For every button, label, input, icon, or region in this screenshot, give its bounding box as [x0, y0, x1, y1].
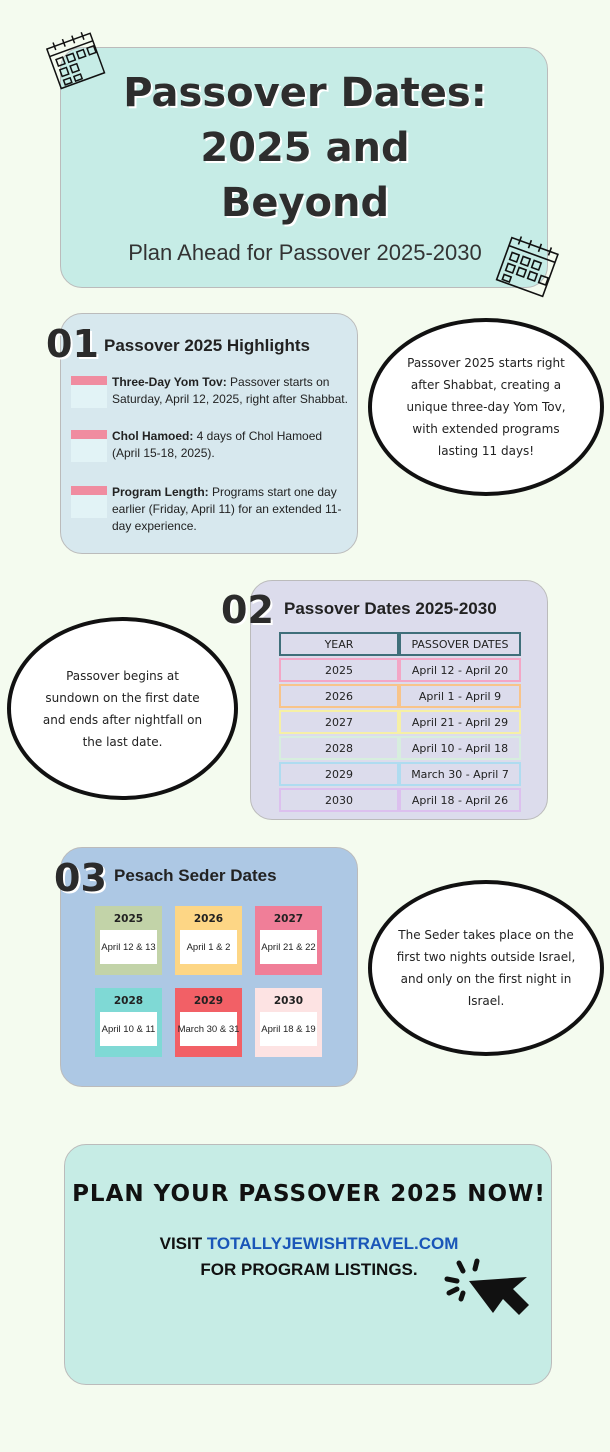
card 2026: 2026 [194, 913, 223, 925]
card 2026 [175, 906, 242, 975]
table [279, 632, 521, 812]
table: April 18 - April 26 [412, 794, 508, 806]
card 2029 [175, 988, 242, 1057]
table: 2029 [325, 768, 353, 780]
heading 01: Passover 2025 Highlights [104, 336, 310, 355]
card 2030 [255, 988, 322, 1057]
title: 2025 and [200, 125, 410, 171]
title: Passover Dates: [123, 70, 487, 116]
speech bubble 3 [368, 880, 604, 1056]
cta heading: PLAN YOUR PASSOVER 2025 NOW! [72, 1181, 546, 1207]
title [123, 70, 487, 226]
card 2028: April 10 & 11 [102, 1024, 155, 1034]
card 2025 [95, 906, 162, 975]
table: 2025 [325, 664, 353, 676]
panel: 03 seder dates [60, 847, 358, 1087]
table: 2026 [325, 690, 353, 702]
cta text [160, 1234, 458, 1279]
cta text: FOR PROGRAM LISTINGS. [200, 1260, 418, 1279]
table: April 12 - April 20 [412, 664, 508, 676]
cta text: VISIT TOTALLYJEWISHTRAVEL.COM [160, 1234, 458, 1253]
card 2028 [95, 988, 162, 1057]
table: YEAR [325, 638, 353, 650]
table: PASSOVER DATES [411, 638, 509, 650]
table: March 30 - April 7 [411, 768, 509, 780]
panel: 02 dates table [250, 580, 548, 820]
speech bubble 2 [7, 617, 238, 800]
title panel [60, 47, 548, 288]
card 2029: March 30 & 31 [178, 1024, 239, 1034]
card 2025: April 12 & 13 [101, 942, 156, 952]
card 2027: April 21 & 22 [261, 942, 316, 952]
number 03: 03 [54, 856, 107, 900]
table: April 21 - April 29 [412, 716, 508, 728]
icon: cursor click [444, 1258, 529, 1315]
speech bubble 2: Passover begins at sundown on the first date and ends after nightfall on the last date. [43, 668, 202, 748]
icon: calendar bottom-right [496, 236, 559, 298]
card 2030: April 18 & 19 [261, 1024, 316, 1034]
card 2028: 2028 [114, 995, 143, 1007]
card 2027: 2027 [274, 913, 303, 925]
table: 2030 [325, 794, 353, 806]
card 2025: 2025 [114, 913, 143, 925]
item: three-day yom tov: Three-Day Yom Tov: Passover starts on Saturday, April 12, 2025, right after Shabbat. [112, 375, 348, 406]
card 2026: April 1 & 2 [187, 942, 230, 952]
item: chol hamoed: Chol Hamoed: 4 days of Chol Hamoed (April 15-18, 2025). [112, 429, 322, 460]
number 01: 01 [46, 322, 99, 366]
title: Beyond [221, 180, 389, 226]
item: program length: Program Length: Programs start one day earlier (Friday, April 11) for an extended 11-day experience. [112, 485, 341, 533]
subtitle: Plan Ahead for Passover 2025-2030 [128, 240, 482, 265]
table: 2027 [325, 716, 353, 728]
panel: call to action [64, 1144, 552, 1385]
speech bubble 1 [368, 318, 604, 496]
icon: calendar top-left [46, 32, 106, 90]
table: April 1 - April 9 [419, 690, 501, 702]
heading 03: Pesach Seder Dates [114, 866, 277, 885]
card 2027 [255, 906, 322, 975]
heading 02: Passover Dates 2025-2030 [284, 599, 497, 618]
table: April 10 - April 18 [412, 742, 508, 754]
card 2030: 2030 [274, 995, 303, 1007]
speech bubble 1: Passover 2025 starts right after Shabbat, creating a unique three-day Yom Tov, with extended programs lasting 11 days! [406, 356, 566, 458]
card 2029: 2029 [194, 995, 223, 1007]
speech bubble 3: The Seder takes place on the first two nights outside Israel, and only on the first night in Israel. [397, 928, 575, 1008]
panel: 01 highlights [60, 313, 358, 554]
table: 2028 [325, 742, 353, 754]
number 02: 02 [221, 588, 274, 632]
